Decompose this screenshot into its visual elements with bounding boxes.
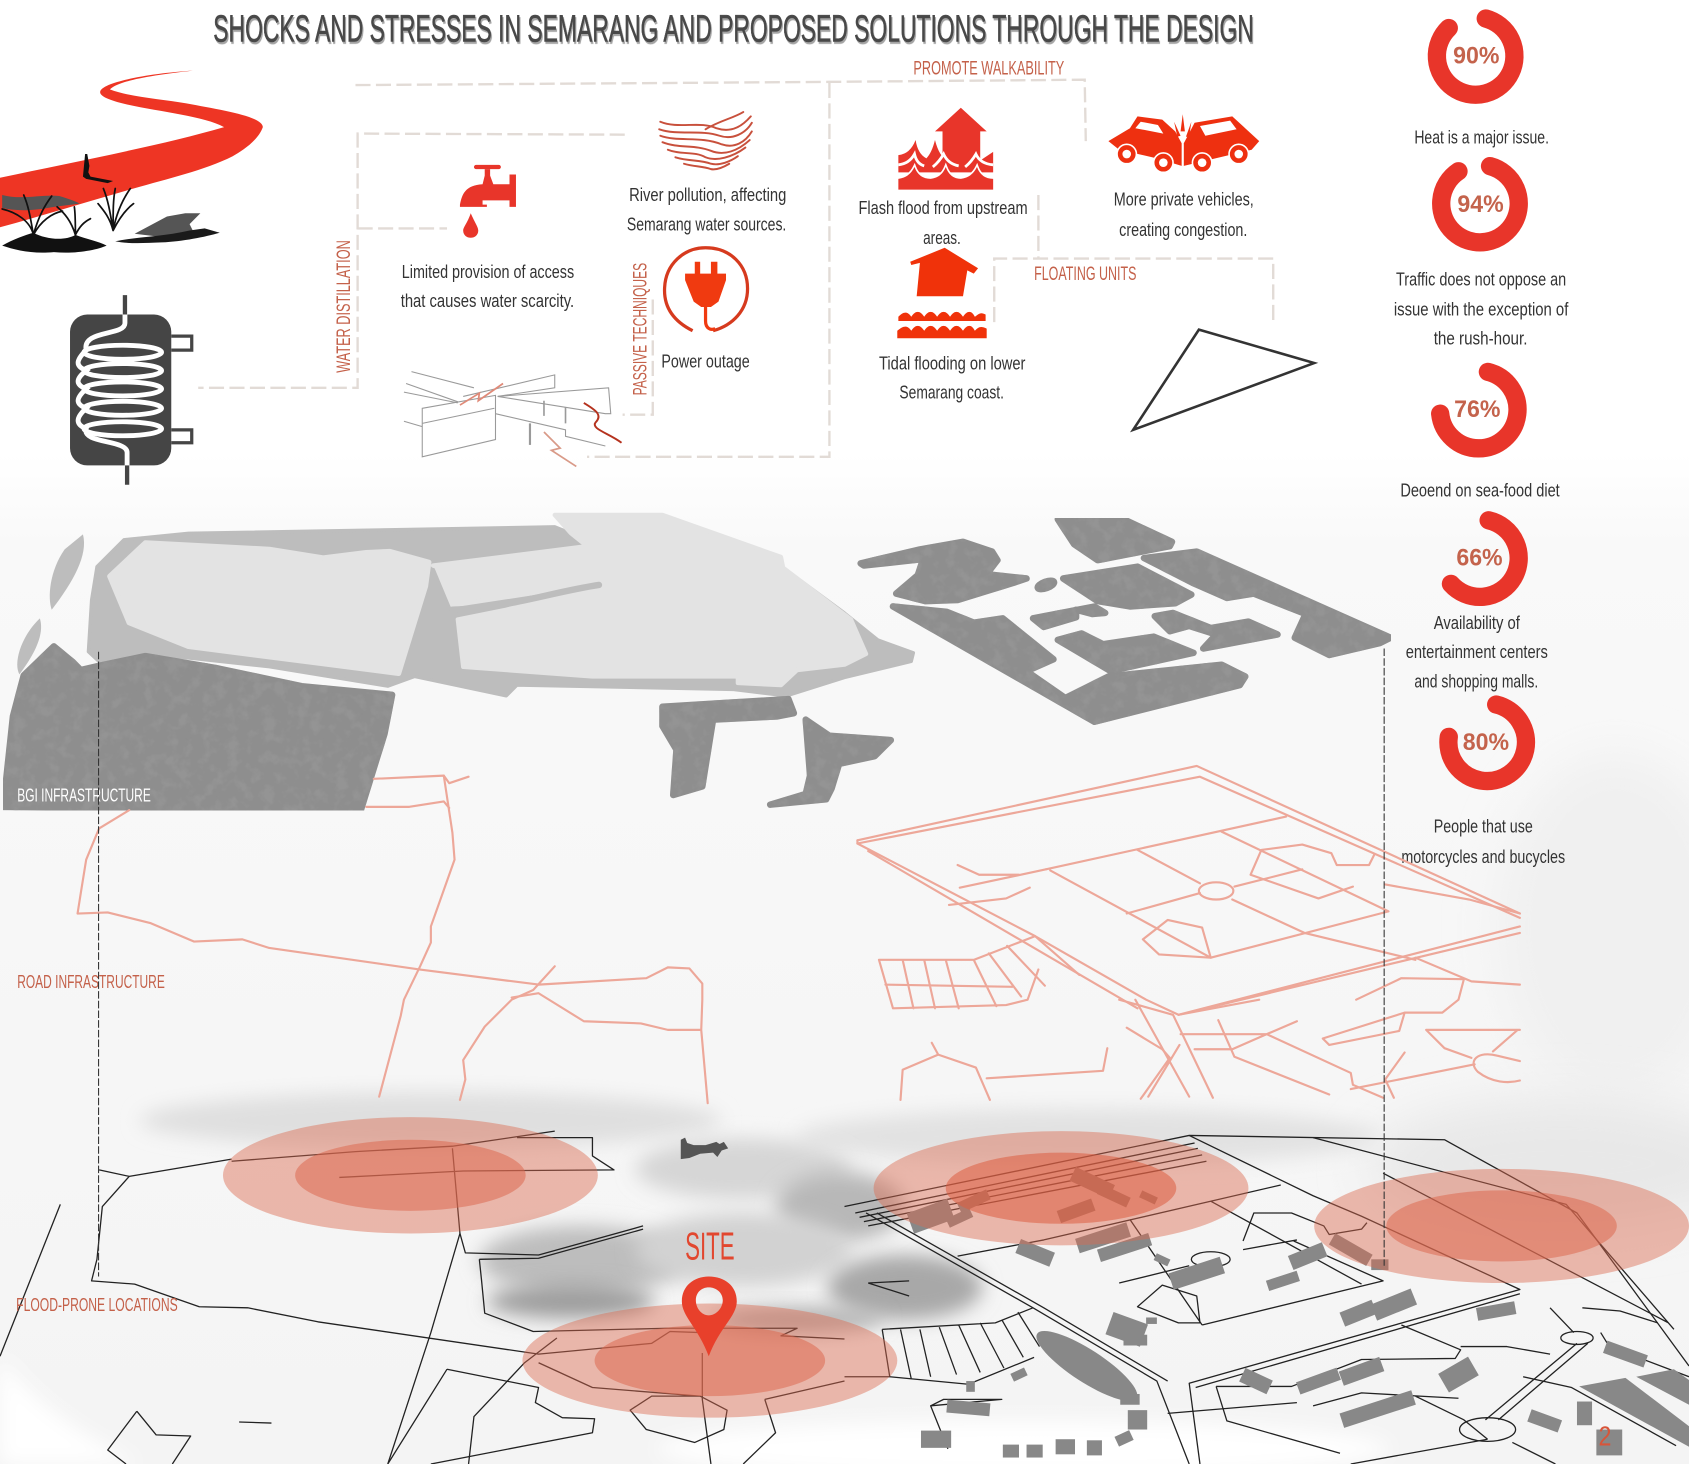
stat: 90% heat: 90% [1453, 44, 1499, 70]
label: floating units: FLOATING UNITS [1034, 263, 1136, 285]
stat: 80% motorcycles: 80% [1463, 730, 1509, 756]
stat: 94% traffic: Traffic does not oppose an [1396, 268, 1566, 289]
text: private vehicles: More private vehicles, [1114, 189, 1254, 210]
map layer: grey buildings [907, 1167, 1689, 1458]
icon: red road with walker and grasses [0, 71, 263, 253]
fog behind flood map [0, 1092, 1390, 1464]
stat: 76% sea-food [1400, 372, 1560, 501]
stat: 66% entertainment: and shopping malls. [1414, 670, 1538, 691]
label: site: SITE [685, 1225, 735, 1268]
text: tidal flooding [879, 353, 1025, 403]
stat: 66% entertainment [1406, 520, 1548, 691]
label: road infrastructure: ROAD INFRASTRUCTURE [17, 971, 165, 992]
text: river pollution [627, 184, 786, 235]
page number: 2 [1599, 1421, 1611, 1452]
stat: 94% traffic: 94% [1457, 192, 1504, 218]
flood zone: centre-east [874, 1131, 1248, 1245]
flood zone: far east [1314, 1169, 1689, 1283]
stat: 76% sea-food: Deoend on sea-food diet [1400, 480, 1560, 501]
stat: 66% entertainment: 66% [1456, 546, 1503, 572]
stat: 94% traffic: the rush-hour. [1434, 328, 1527, 349]
map layer: black road network [0, 1131, 1689, 1464]
map layer: BGI light landmass [17, 515, 913, 696]
text: private vehicles [1114, 189, 1254, 240]
stat: 66% entertainment: Availability of [1434, 612, 1521, 633]
text: river pollution: River pollution, affecting [629, 184, 786, 205]
text: limited provision: that causes water scarcity. [401, 290, 574, 311]
label: water distillation: WATER DISTILLATION [333, 240, 355, 373]
vertical guide lines [99, 649, 1384, 1277]
flood zone: north-west [223, 1117, 598, 1233]
stat: 80% motorcycles [1401, 705, 1565, 867]
stat: 90% heat: Heat is a major issue. [1414, 126, 1549, 147]
icon: polluted river waves [659, 112, 752, 169]
icon: flash flood house [898, 108, 993, 190]
label: promote walkability: PROMOTE WALKABILITY [913, 57, 1064, 79]
stat: 76% sea-food: 76% [1454, 397, 1500, 423]
text: flash flood: areas. [923, 227, 961, 248]
sketch: passive techniques roof section [404, 372, 622, 466]
label: BGI infrastructure: BGI INFRASTRUCTURE [17, 784, 151, 805]
text: private vehicles: creating congestion. [1119, 219, 1247, 240]
connector lines [198, 80, 1273, 457]
map layer: road infrastructure [78, 766, 1520, 1103]
text: flash flood: Flash flood from upstream [859, 197, 1028, 218]
text: flash flood [859, 197, 1028, 248]
icon: water distiller [70, 295, 192, 485]
icon: site location pin [682, 1277, 737, 1356]
text: limited provision [401, 261, 574, 311]
stat: 94% traffic [1394, 166, 1569, 349]
stat: 80% motorcycles: People that use [1434, 816, 1533, 837]
icon: colliding cars [1108, 114, 1259, 172]
stat: 80% motorcycles: motorcycles and bucycles [1401, 846, 1565, 867]
text: power outage: Power outage [661, 350, 750, 371]
label: flood-prone locations: FLOOD-PRONE LOCATIONS [16, 1294, 178, 1315]
icon: power plug [665, 248, 748, 331]
text: tidal flooding: Tidal flooding on lower [879, 353, 1025, 374]
icon: tidal flood house [897, 248, 987, 338]
text: limited provision: Limited provision of access [402, 261, 574, 282]
stat: 94% traffic: issue with the exception of [1394, 299, 1569, 320]
text: river pollution: Semarang water sources. [627, 214, 786, 235]
label: passive techniques: PASSIVE TECHNIQUES [629, 263, 651, 395]
stat: 66% entertainment: entertainment centers [1406, 641, 1548, 662]
flood zone: site [522, 1303, 897, 1418]
text: tidal flooding: Semarang coast. [899, 382, 1004, 403]
icon: faucet [460, 165, 516, 238]
icon: floating unit triangle [1133, 330, 1314, 430]
map layer: BGI dark blocks [3, 518, 1391, 810]
stat: 90% heat [1414, 19, 1549, 147]
icon: aircraft [681, 1138, 728, 1159]
